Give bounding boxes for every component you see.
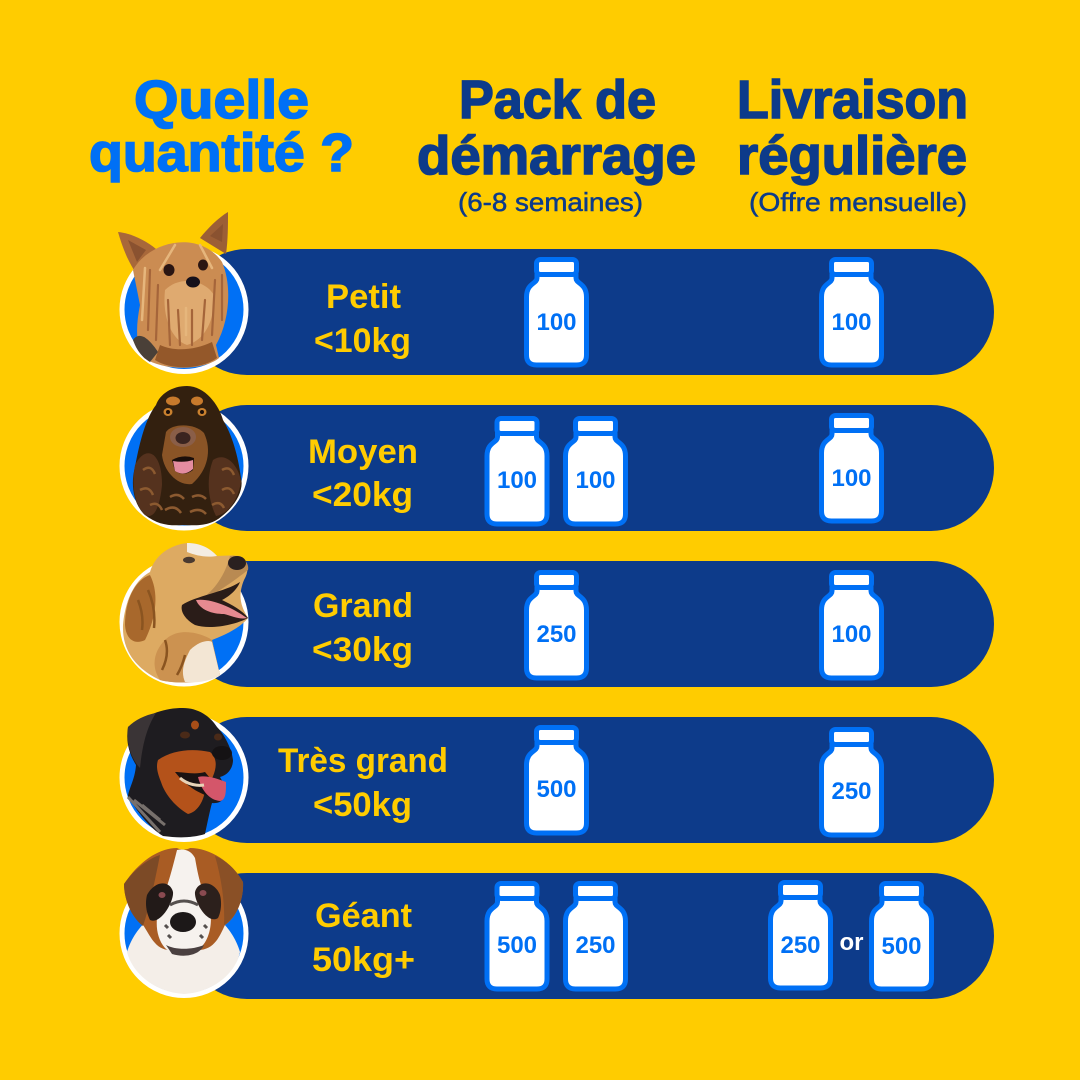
label: Très grand <50kg: <50kg bbox=[313, 786, 412, 824]
portrait circle bbox=[122, 248, 246, 372]
row: Petit bbox=[118, 212, 994, 375]
label: Grand <30kg: Grand bbox=[313, 587, 413, 625]
portrait circle bbox=[122, 560, 246, 684]
bottle 500 monthly: 500 bbox=[881, 933, 922, 960]
label: Très grand <50kg bbox=[278, 742, 448, 824]
row bar bbox=[184, 873, 994, 999]
bottle 100 monthly bbox=[822, 260, 882, 365]
dog: Saint Bernard bbox=[124, 848, 243, 994]
column heading: Pack de démarrage: (6-8 semaines) bbox=[458, 187, 643, 217]
dog: rottweiler bbox=[127, 708, 233, 837]
row bar bbox=[184, 249, 994, 375]
column heading: Pack de démarrage bbox=[417, 70, 696, 217]
bottle 250 starter bbox=[526, 572, 586, 678]
bottle 100 monthly bbox=[822, 572, 882, 678]
label: Grand <30kg: <30kg bbox=[312, 631, 413, 669]
dog: golden retriever bbox=[123, 543, 248, 683]
column heading: Pack de démarrage: Pack de bbox=[459, 70, 656, 130]
row bar bbox=[184, 405, 994, 531]
bottle 250 starter: 250 bbox=[575, 932, 616, 959]
connector: or: or bbox=[840, 929, 864, 956]
bottle 250 starter bbox=[566, 884, 626, 989]
label: Grand <30kg bbox=[312, 587, 413, 669]
bottle 250 starter: 250 bbox=[536, 621, 577, 648]
row: Géant bbox=[122, 848, 994, 999]
portrait circle bbox=[122, 872, 246, 996]
column heading: Livraison régulière: régulière bbox=[737, 126, 967, 186]
bottle 100 starter B: 100 bbox=[575, 467, 616, 494]
dog: cocker spaniel bbox=[133, 386, 242, 525]
column heading: Livraison régulière: Livraison bbox=[737, 70, 968, 130]
bottle 500 starter: 500 bbox=[497, 932, 537, 959]
portrait circle bbox=[122, 404, 246, 528]
bottle 500 starter: 500 bbox=[536, 776, 577, 803]
label: Géant 50kg+ bbox=[312, 897, 415, 979]
column heading: Livraison régulière bbox=[737, 70, 968, 217]
label: Moyen <20kg: <20kg bbox=[312, 476, 413, 514]
bottle 100 starter bbox=[526, 260, 586, 365]
label: Moyen <20kg: Moyen bbox=[308, 433, 418, 471]
title: Quelle quantité ?: quantité ? bbox=[89, 123, 354, 183]
row bar bbox=[184, 561, 994, 687]
row: Grand bbox=[122, 543, 994, 687]
bottle 250 monthly bbox=[822, 730, 882, 835]
title: Quelle quantité ? bbox=[89, 70, 354, 183]
bottle 100 starter A: 100 bbox=[497, 467, 537, 494]
label: Géant 50kg+: Géant bbox=[315, 897, 412, 935]
bottle 500 monthly bbox=[872, 884, 932, 989]
row bar bbox=[184, 717, 994, 843]
portrait circle bbox=[122, 716, 246, 840]
label: Géant 50kg+: 50kg+ bbox=[312, 941, 415, 979]
title: Quelle quantité ?: Quelle bbox=[134, 70, 309, 130]
row: Moyen bbox=[122, 386, 994, 531]
label: Petit <10kg: Petit bbox=[326, 278, 401, 316]
bottle 100 monthly: 100 bbox=[831, 309, 872, 336]
bottle 250 monthly: 250 bbox=[780, 932, 821, 959]
bottle 500 starter bbox=[487, 884, 547, 989]
bottle 250 monthly bbox=[770, 882, 830, 988]
dog: Yorkshire terrier bbox=[118, 212, 228, 368]
label: Très grand <50kg: Très grand bbox=[278, 742, 448, 780]
label: Moyen <20kg bbox=[308, 433, 418, 514]
bottle 100 monthly: 100 bbox=[831, 465, 872, 492]
bottle 250 monthly: 250 bbox=[831, 778, 872, 805]
bottle 100 starter: 100 bbox=[536, 309, 577, 336]
column heading: Livraison régulière: (Offre mensuelle) bbox=[749, 187, 967, 217]
label: Petit <10kg bbox=[314, 278, 411, 360]
bottle 100 starter A bbox=[487, 418, 547, 524]
label: Petit <10kg: <10kg bbox=[314, 322, 411, 360]
column heading: Pack de démarrage: démarrage bbox=[417, 126, 696, 186]
bottle 100 monthly: 100 bbox=[831, 621, 872, 648]
row: Très grand bbox=[122, 708, 994, 843]
bottle 100 monthly bbox=[822, 416, 882, 521]
bottle 100 starter B bbox=[566, 418, 626, 524]
bottle 500 starter bbox=[526, 728, 586, 833]
